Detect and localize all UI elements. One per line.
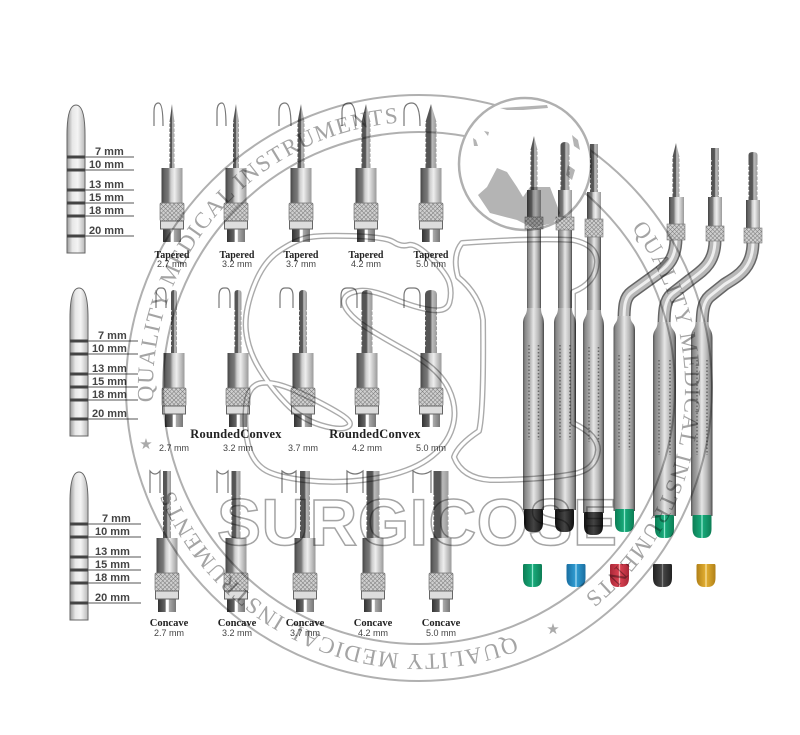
- rounded convex label left: RoundedConvex: [190, 427, 282, 441]
- depth gauge: row 1: 20 mm: [89, 225, 124, 237]
- watermark stars: ★: [139, 435, 153, 453]
- tapered 3.7 mm: [279, 103, 319, 269]
- depth gauge: row 1: [67, 105, 134, 253]
- depth gauge: row 2: 7 mm: [98, 330, 127, 342]
- depth gauge: row 1: 7 mm: [95, 146, 124, 158]
- watermark ring text 1: QUALITY MEDICAL INSTRUMENTS: [138, 108, 396, 402]
- bent osteotome 3: [691, 152, 762, 538]
- tapered 5.0 mm: Tapered: [413, 250, 449, 261]
- tapered 2.7 mm: [154, 103, 190, 269]
- cap: green: [523, 564, 542, 587]
- row 1: tapered tips: [154, 103, 449, 269]
- rounded convex 3.2 mm: [219, 288, 253, 453]
- watermark ring text 2: QUALITY MEDICAL INSTRUMENTS: [587, 222, 700, 606]
- depth gauge: row 1: 10 mm: [89, 159, 124, 171]
- tapered 2.7 mm: Tapered: [154, 250, 190, 261]
- depth gauge: row 2: 13 mm: [92, 363, 127, 375]
- depth gauge: row 3: 7 mm: [102, 513, 131, 525]
- bent osteotome 2: [653, 148, 724, 538]
- concave 2.7 mm: Concave: [150, 618, 189, 629]
- tapered 4.2 mm: [342, 103, 384, 269]
- tapered 5.0 mm: [404, 103, 449, 269]
- watermark S logo outline: [245, 236, 455, 482]
- concave 3.7 mm: 3.7 mm: [290, 628, 320, 638]
- watermark ring text 3: QUALITY MEDICAL INSTRUMENTS: [160, 492, 517, 670]
- row 2: rounded convex tips: [156, 288, 446, 453]
- depth gauge: row 3: 15 mm: [95, 559, 130, 571]
- tapered 3.2 mm: 3.2 mm: [222, 259, 252, 269]
- tapered 4.2 mm: Tapered: [348, 250, 384, 261]
- straight osteotome 1: [523, 136, 544, 532]
- rounded convex 4.2 mm: 4.2 mm: [352, 443, 382, 453]
- row 3: concave tips: [150, 471, 461, 638]
- cap: black: [653, 564, 672, 587]
- concave 3.7 mm: Concave: [286, 618, 325, 629]
- rounded convex 3.2 mm: 3.2 mm: [223, 443, 253, 453]
- tapered 2.7 mm: 2.7 mm: [157, 259, 187, 269]
- cap: red: [610, 564, 629, 587]
- rounded convex 5.0 mm: 5.0 mm: [416, 443, 446, 453]
- concave 4.2 mm: [347, 471, 393, 638]
- loose colour caps: [523, 564, 716, 587]
- watermark stars: [139, 435, 560, 638]
- watermark globe: [459, 98, 591, 230]
- depth gauge: row 3: 18 mm: [95, 572, 130, 584]
- tapered 3.7 mm: Tapered: [283, 250, 319, 261]
- concave 4.2 mm: 4.2 mm: [358, 628, 388, 638]
- depth gauge: row 1: 18 mm: [89, 205, 124, 217]
- concave 5.0 mm: 5.0 mm: [426, 628, 456, 638]
- tapered 4.2 mm: 4.2 mm: [351, 259, 381, 269]
- depth gauge: row 3: 13 mm: [95, 546, 130, 558]
- straight osteotome 2: [554, 142, 576, 532]
- rounded convex 3.7 mm: 3.7 mm: [288, 443, 318, 453]
- depth gauge: row 3: [70, 472, 141, 620]
- concave 5.0 mm: [413, 471, 461, 638]
- depth gauge: row 2: 10 mm: [92, 343, 127, 355]
- bent osteotome 1: [614, 143, 685, 532]
- large straight osteotomes: [523, 136, 604, 535]
- depth gauge: row 2: 15 mm: [92, 376, 127, 388]
- depth gauge: row 2: [70, 288, 138, 436]
- depth gauge: row 1: 13 mm: [89, 179, 124, 191]
- rounded convex label right: RoundedConvex: [329, 427, 421, 441]
- concave 3.2 mm: 3.2 mm: [222, 628, 252, 638]
- tapered 3.2 mm: Tapered: [219, 250, 255, 261]
- tapered 3.7 mm: 3.7 mm: [286, 259, 316, 269]
- straight osteotome 3: [583, 144, 604, 535]
- tapered 3.2 mm: [217, 103, 255, 269]
- cap: gold: [696, 564, 716, 587]
- watermark stars: ★: [546, 620, 560, 638]
- depth gauge: row 2: 18 mm: [92, 389, 127, 401]
- depth gauge: row 1: 15 mm: [89, 192, 124, 204]
- watermark wordmark: SURGICOSE: [217, 485, 617, 559]
- depth gauge: row 2: 20 mm: [92, 408, 127, 420]
- watermark I logo outline: [454, 239, 598, 480]
- watermark rings: [126, 95, 712, 681]
- concave 2.7 mm: [150, 471, 189, 638]
- concave 4.2 mm: Concave: [354, 618, 393, 629]
- cap: blue: [566, 564, 586, 587]
- rounded convex 4.2 mm: [341, 288, 382, 453]
- rounded convex 3.7 mm: [280, 288, 318, 453]
- concave 2.7 mm: 2.7 mm: [154, 628, 184, 638]
- tapered 5.0 mm: 5.0 mm: [416, 259, 446, 269]
- concave 3.2 mm: [217, 471, 257, 638]
- rounded convex 2.7 mm: [156, 288, 189, 453]
- large bent osteotomes: [614, 143, 762, 538]
- concave 3.2 mm: Concave: [218, 618, 257, 629]
- concave 3.7 mm: [282, 471, 325, 638]
- concave 5.0 mm: Concave: [422, 618, 461, 629]
- watermark overlay: [125, 94, 713, 682]
- depth gauge: row 3: 10 mm: [95, 526, 130, 538]
- depth gauge: row 3: 20 mm: [95, 592, 130, 604]
- rounded convex 2.7 mm: 2.7 mm: [159, 443, 189, 453]
- rounded convex 5.0 mm: [404, 288, 446, 453]
